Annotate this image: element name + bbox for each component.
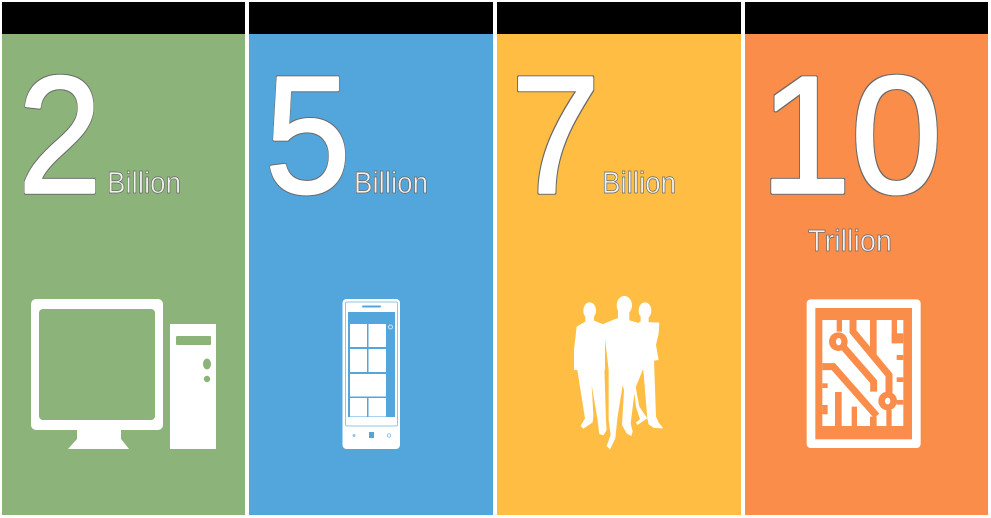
icon: circuit board [807,299,921,448]
number: 5: 5 [265,43,350,229]
panel: 2 billion computers [2,2,245,515]
icon: three people silhouette [574,296,663,449]
panel: 5 billion phones [249,2,493,515]
icon: desktop computer [31,299,216,449]
icon: smartphone [342,299,400,449]
panel: 10 trillion chips [745,2,988,515]
header bar: people [497,2,741,34]
header bar: computers [2,2,245,34]
unit: Billion: Billion [602,165,676,200]
panel: 7 billion people [497,2,741,515]
unit: Billion: Billion [107,165,181,200]
header bar: phones [249,2,493,34]
unit: Billion: Billion [354,165,428,200]
header bar: chips [745,2,988,34]
number: 10: 10 [760,42,942,229]
number: 2: 2 [18,41,102,228]
unit: Trillion: Trillion [808,223,892,258]
number: 7: 7 [511,42,600,228]
